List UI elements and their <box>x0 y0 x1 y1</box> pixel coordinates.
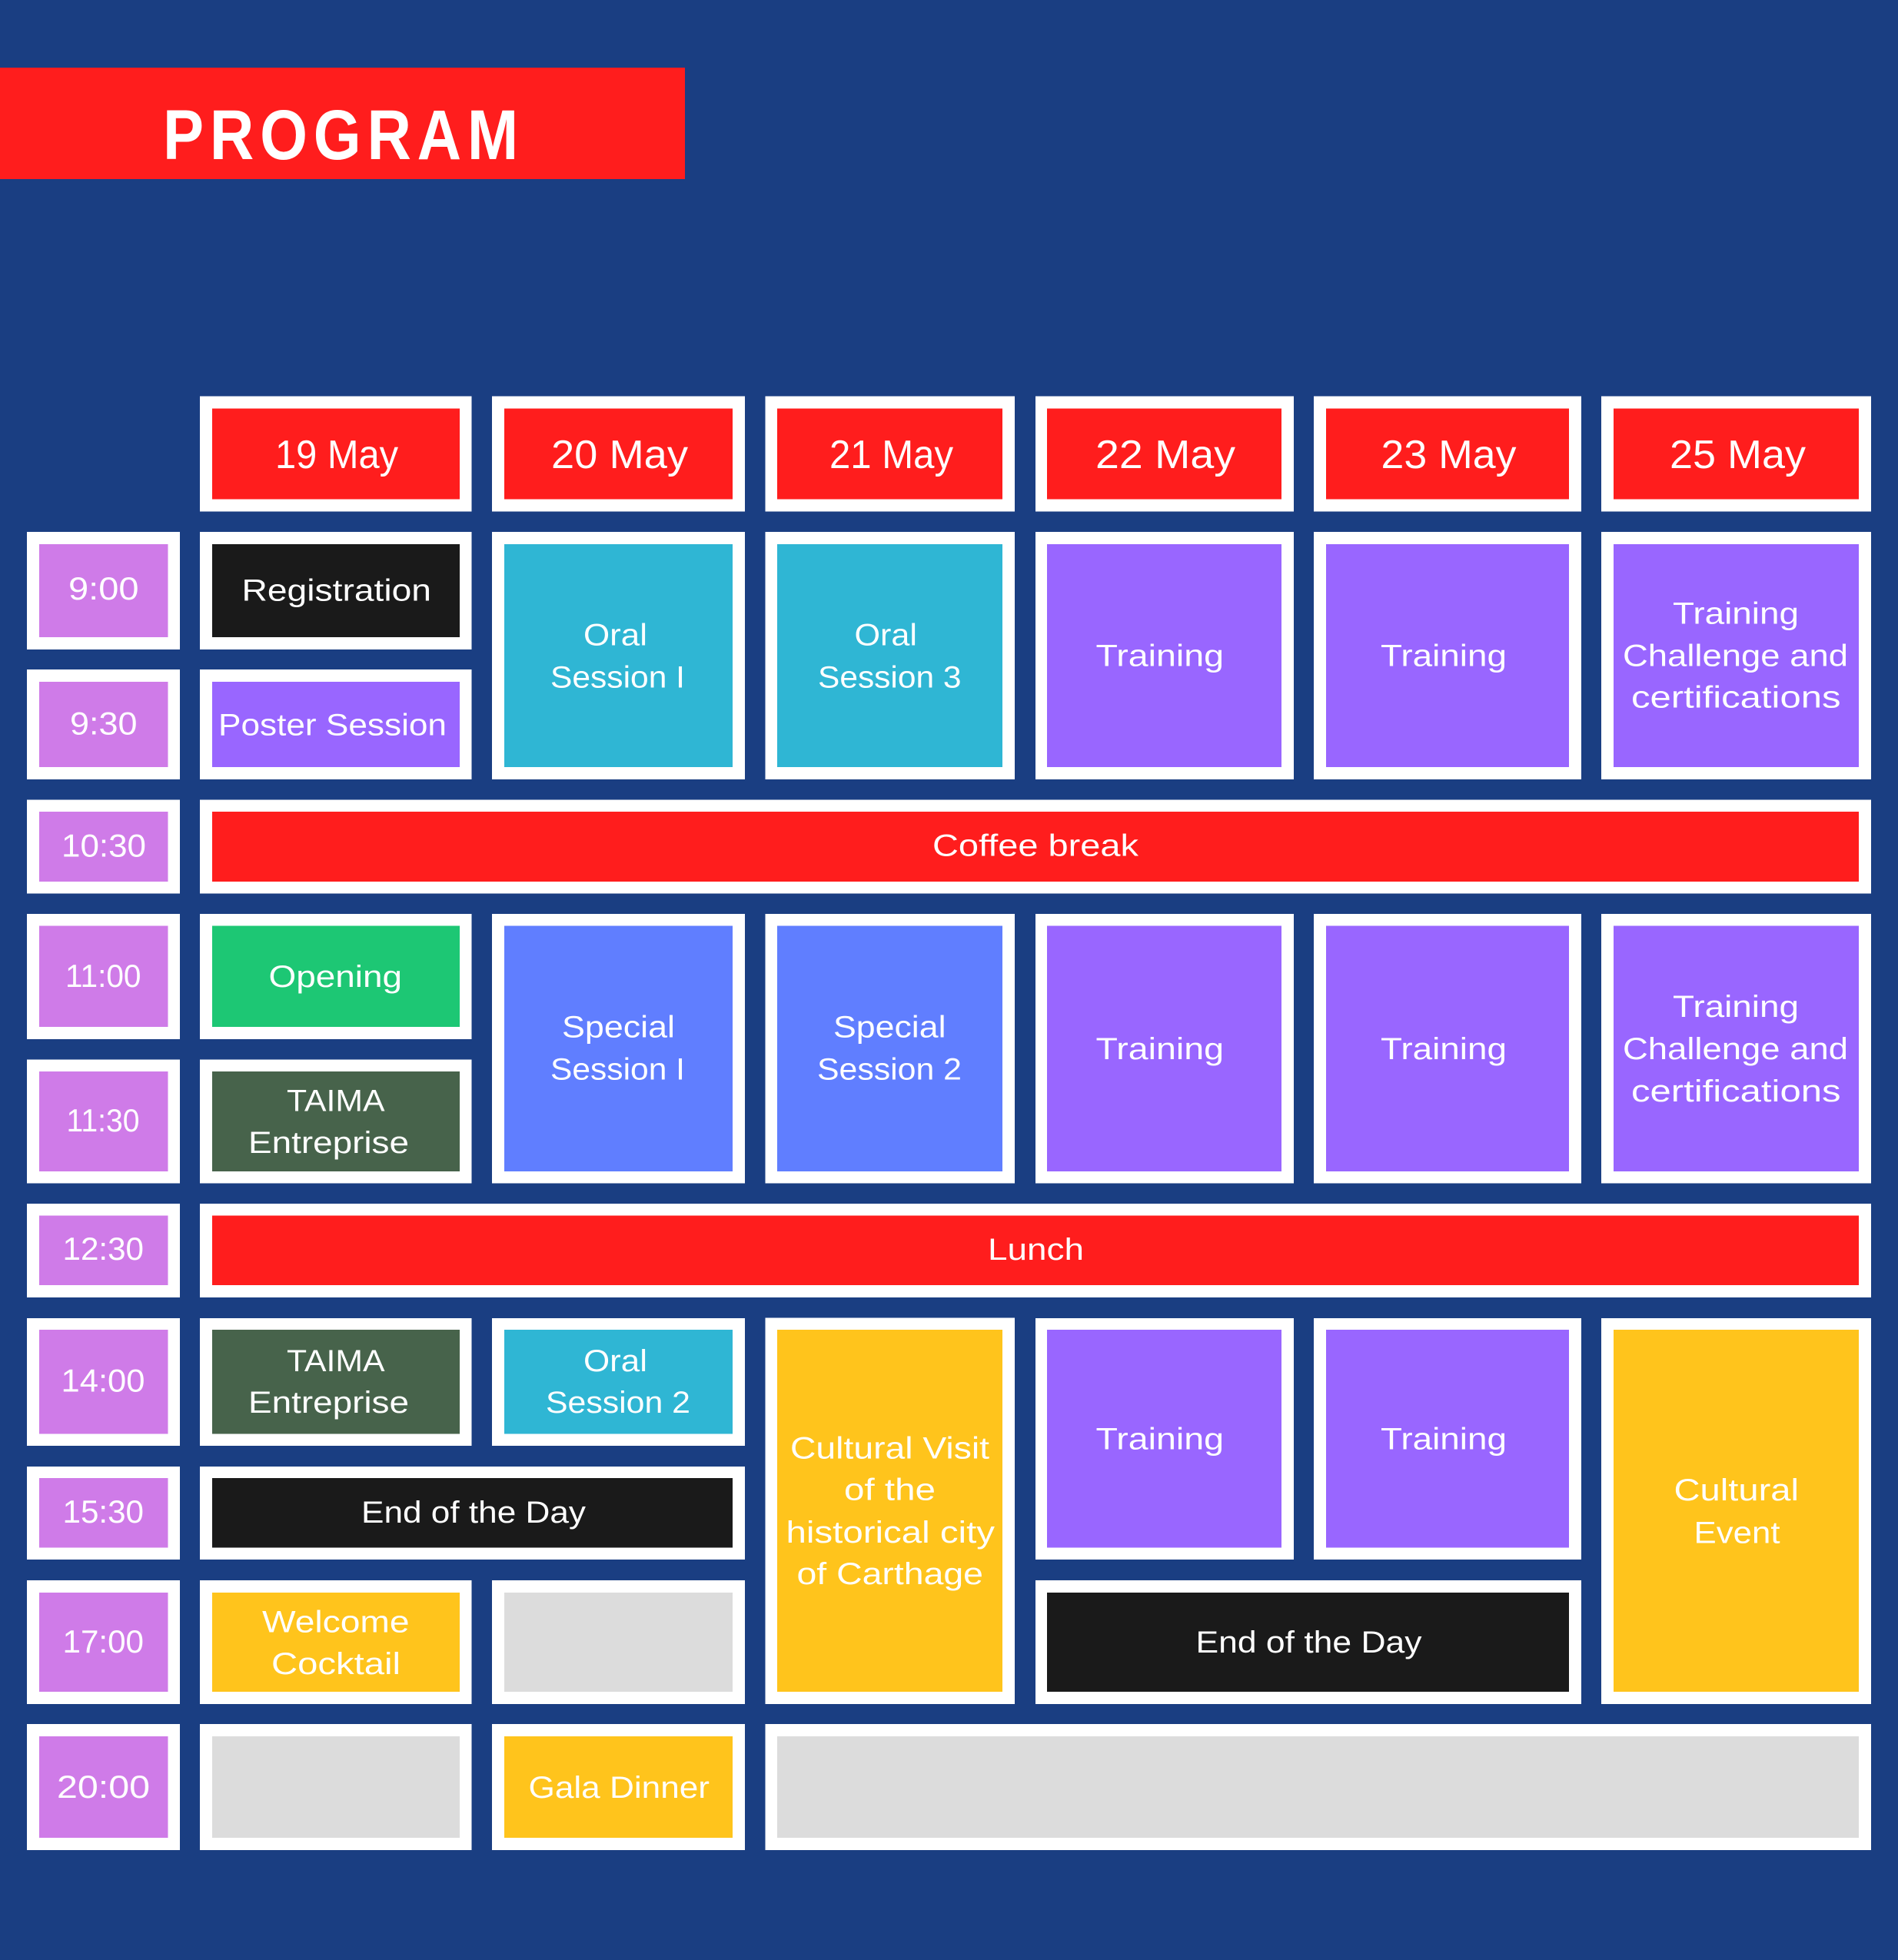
time: 12:30: 12:30 <box>63 1231 144 1267</box>
time: 9:00: 9:00 <box>68 570 138 606</box>
session: Cultural Visit of the historical city of Carthage <box>766 1317 1015 1704</box>
header: 25 May <box>1601 397 1871 512</box>
session: Training 22 May afternoon <box>1035 1318 1294 1560</box>
header: 21 May: 21 May <box>829 433 953 477</box>
header: 22 May: 22 May <box>1095 433 1235 477</box>
empty slot: 20 May 17:00 <box>492 1580 745 1704</box>
break: Coffee break <box>200 799 1871 893</box>
break: Coffee break: Coffee break <box>932 829 1139 862</box>
end of the day: 19 to 20 May <box>200 1467 745 1560</box>
time: 11:00: 11:00 <box>65 958 141 994</box>
end of the day: 22 to 23 May: End of the Day <box>1196 1626 1422 1659</box>
session: Oral Session 3: Oral <box>855 618 917 652</box>
session: Training Challenge and certifications late morning <box>1601 914 1871 1184</box>
time: 12:30 <box>27 1204 180 1297</box>
session: Cultural Event <box>1601 1318 1871 1704</box>
session: Cultural Visit of the historical city of Carthage: historical city <box>786 1516 995 1550</box>
session: TAIMA Entreprise morning: TAIMA <box>287 1084 385 1118</box>
session: Special Session 2 <box>766 914 1015 1184</box>
session: Training 23 May morning <box>1314 532 1581 779</box>
session: Oral Session 3 <box>766 532 1015 779</box>
session: Gala Dinner <box>492 1724 745 1850</box>
session: Training 23 May afternoon <box>1314 1318 1581 1560</box>
session: Training 23 May late morning: Training <box>1381 1032 1507 1066</box>
time: 20:00 <box>27 1724 180 1850</box>
time: 10:30 <box>27 799 180 893</box>
empty slot: 21 to 25 May 20:00 <box>766 1724 1871 1850</box>
session: Opening <box>200 914 472 1039</box>
session: Training Challenge and certifications morning: Challenge and <box>1623 639 1848 673</box>
time: 17:00 <box>27 1580 180 1704</box>
time: 14:00: 14:00 <box>61 1362 145 1399</box>
title banner: PROGRAM <box>163 96 524 174</box>
header: 22 May <box>1035 397 1294 512</box>
session: Training 22 May morning: Training <box>1096 639 1224 673</box>
session: Special Session 2: Special <box>833 1010 946 1044</box>
session: TAIMA Entreprise afternoon <box>200 1318 472 1446</box>
session: Welcome Cocktail: Cocktail <box>271 1647 401 1681</box>
session: Gala Dinner: Gala Dinner <box>529 1771 710 1805</box>
session: TAIMA Entreprise afternoon: TAIMA <box>287 1344 385 1378</box>
session: Cultural Event: Event <box>1694 1516 1780 1550</box>
time: 20:00: 20:00 <box>57 1769 150 1805</box>
session: TAIMA Entreprise morning <box>200 1059 472 1184</box>
session: Cultural Visit of the historical city of Carthage: of Carthage <box>796 1557 983 1591</box>
session: Cultural Event: Cultural <box>1674 1473 1799 1507</box>
session: Training 22 May late morning <box>1035 914 1294 1184</box>
session: Training 23 May afternoon: Training <box>1381 1422 1507 1456</box>
session: Registration: Registration <box>241 573 431 607</box>
time: 9:30: 9:30 <box>70 706 137 741</box>
time: 9:00 <box>27 532 180 649</box>
session: Training 23 May morning: Training <box>1381 639 1507 673</box>
session: Oral Session I: Oral <box>583 618 647 652</box>
session: Training Challenge and certifications late morning: Challenge and <box>1623 1032 1848 1066</box>
time: 15:30: 15:30 <box>63 1493 144 1530</box>
title banner <box>0 68 685 179</box>
time: 9:30 <box>27 669 180 779</box>
session: Special Session I <box>492 914 745 1184</box>
time: 11:00 <box>27 914 180 1039</box>
time: 10:30: 10:30 <box>61 827 146 864</box>
session: Oral Session 2: Session 2 <box>546 1386 690 1420</box>
time: 15:30 <box>27 1467 180 1560</box>
session: Training Challenge and certifications late morning: Training <box>1673 990 1799 1024</box>
session: Oral Session 3: Session 3 <box>818 661 961 695</box>
end of the day: 22 to 23 May <box>1035 1580 1581 1704</box>
session: Training 22 May morning <box>1035 532 1294 779</box>
header: 20 May <box>492 397 745 512</box>
break: Lunch: Lunch <box>988 1233 1084 1267</box>
session: TAIMA Entreprise afternoon: Entreprise <box>248 1386 409 1420</box>
session: Cultural Visit of the historical city of Carthage: Cultural Visit <box>790 1431 989 1465</box>
header: 19 May: 19 May <box>275 433 398 477</box>
header: 23 May <box>1314 397 1581 512</box>
session: Oral Session I <box>492 532 745 779</box>
session: Training Challenge and certifications morning <box>1601 532 1871 779</box>
session: Training Challenge and certifications morning: Training <box>1673 596 1799 630</box>
time: 17:00: 17:00 <box>63 1623 144 1659</box>
header: 21 May <box>766 397 1015 512</box>
session: Training 22 May afternoon: Training <box>1096 1422 1224 1456</box>
session: Special Session I: Special <box>562 1010 675 1044</box>
session: TAIMA Entreprise morning: Entreprise <box>248 1126 409 1160</box>
session: Oral Session I: Session I <box>550 661 685 695</box>
session: Poster Session: Poster Session <box>218 709 447 742</box>
empty slot: 19 May 20:00 <box>200 1724 472 1850</box>
session: Special Session 2: Session 2 <box>817 1053 962 1087</box>
break: Lunch <box>200 1204 1871 1297</box>
session: Training 22 May late morning: Training <box>1096 1032 1224 1066</box>
time: 14:00 <box>27 1318 180 1446</box>
session: Opening: Opening <box>269 960 402 994</box>
session: Oral Session 2: Oral <box>583 1344 647 1378</box>
session: Training Challenge and certifications morning: certifications <box>1631 681 1840 715</box>
session: Special Session I: Session I <box>550 1053 685 1087</box>
session: Welcome Cocktail: Welcome <box>262 1605 409 1639</box>
session: Poster Session <box>200 669 472 779</box>
header: 25 May: 25 May <box>1670 433 1806 477</box>
session: Training Challenge and certifications late morning: certifications <box>1631 1075 1840 1108</box>
session: Cultural Visit of the historical city of Carthage: of the <box>844 1473 936 1507</box>
session: Oral Session 2 <box>492 1318 745 1446</box>
header: 19 May <box>200 397 472 512</box>
session: Welcome Cocktail <box>200 1580 472 1704</box>
header: 23 May: 23 May <box>1381 433 1516 477</box>
session: Registration <box>200 532 472 649</box>
session: Training 23 May late morning <box>1314 914 1581 1184</box>
header: 20 May: 20 May <box>551 433 688 477</box>
time: 11:30 <box>27 1059 180 1184</box>
time: 11:30: 11:30 <box>66 1102 140 1138</box>
end of the day: 19 to 20 May: End of the Day <box>361 1496 586 1530</box>
